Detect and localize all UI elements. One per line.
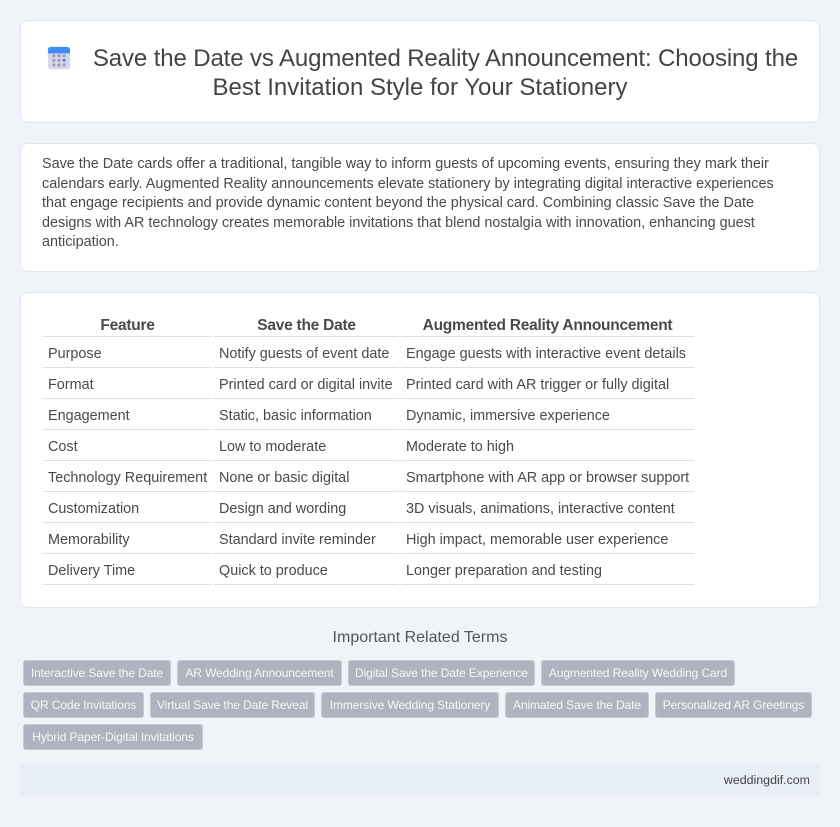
- icon: calendar: [48, 46, 70, 70]
- table rows: Dynamic, immersive experience: [406, 408, 610, 424]
- comparison table: [43, 317, 694, 585]
- table rows: High impact, memorable user experience: [406, 532, 668, 548]
- related terms tags: Digital Save the Date Experience: [355, 666, 528, 680]
- heading: [93, 45, 798, 101]
- table header: [43, 317, 694, 337]
- table rows: Moderate to high: [406, 439, 514, 455]
- related terms tags: Personalized AR Greetings: [663, 698, 804, 712]
- related terms tags: Interactive Save the Date: [31, 666, 163, 680]
- table rows: Low to moderate: [219, 439, 326, 455]
- intro paragraph: that engage recipients and provide dynamic content beyond the physical card. Combining classic Save the Date: [42, 195, 754, 211]
- table header: Augmented Reality Announcement: [423, 317, 672, 334]
- table rows: Delivery Time: [48, 563, 135, 579]
- related terms tags: Immersive Wedding Stationery: [330, 698, 490, 712]
- title card: [20, 20, 820, 123]
- intro paragraph: anticipation.: [42, 234, 119, 250]
- table rows: Printed card with AR trigger or fully digital: [406, 377, 669, 393]
- table rows: Purpose: [48, 346, 102, 362]
- intro paragraph: designs with AR technology creates memorable invitations that blend nostalgia with innovation, enhancing guest: [42, 215, 755, 231]
- related terms tags: [23, 660, 812, 750]
- table rows: Static, basic information: [219, 408, 372, 424]
- heading: Best Invitation Style for Your Stationery: [213, 74, 627, 101]
- related terms tags: Augmented Reality Wedding Card: [549, 666, 727, 680]
- intro text panel: [20, 143, 820, 272]
- table rows: Technology Requirement: [48, 470, 207, 486]
- table rows: Longer preparation and testing: [406, 563, 602, 579]
- table rows: Standard invite reminder: [219, 532, 376, 548]
- table rows: Customization: [48, 501, 139, 517]
- heading: Save the Date vs Augmented Reality Announcement: Choosing the: [93, 45, 798, 72]
- table rows: Printed card or digital invite: [219, 377, 393, 393]
- table rows: Engagement: [48, 408, 130, 424]
- table rows: Notify guests of event date: [219, 346, 389, 362]
- table rows: Quick to produce: [219, 563, 328, 579]
- related terms tags: QR Code Invitations: [31, 698, 136, 712]
- intro paragraph: Save the Date cards offer a traditional, tangible way to inform guests of upcoming events, ensuring they mark their: [42, 156, 769, 172]
- table rows: Smartphone with AR app or browser support: [406, 470, 689, 486]
- footer bar: [20, 763, 820, 797]
- related terms tags: Hybrid Paper-Digital Invitations: [32, 730, 194, 744]
- table rows: Engage guests with interactive event details: [406, 346, 686, 362]
- related terms tags: AR Wedding Announcement: [185, 666, 334, 680]
- table header: Save the Date: [257, 317, 356, 334]
- table rows: Format: [48, 377, 94, 393]
- table rows: Design and wording: [219, 501, 346, 517]
- intro paragraph: [42, 156, 774, 250]
- comparison table panel: [20, 292, 820, 608]
- related terms heading: Important Related Terms: [333, 629, 507, 646]
- table rows: [43, 346, 694, 585]
- table rows: None or basic digital: [219, 470, 349, 486]
- related terms tags: Animated Save the Date: [513, 698, 641, 712]
- related terms tags: Virtual Save the Date Reveal: [157, 698, 308, 712]
- table rows: Cost: [48, 439, 78, 455]
- table rows: 3D visuals, animations, interactive content: [406, 501, 675, 517]
- table rows: Memorability: [48, 532, 130, 548]
- footer source: weddingdif.com: [724, 773, 810, 787]
- table header: Feature: [100, 317, 155, 334]
- intro paragraph: calendars early. Augmented Reality announcements elevate stationery by integrating digital interactive experiences: [42, 176, 774, 192]
